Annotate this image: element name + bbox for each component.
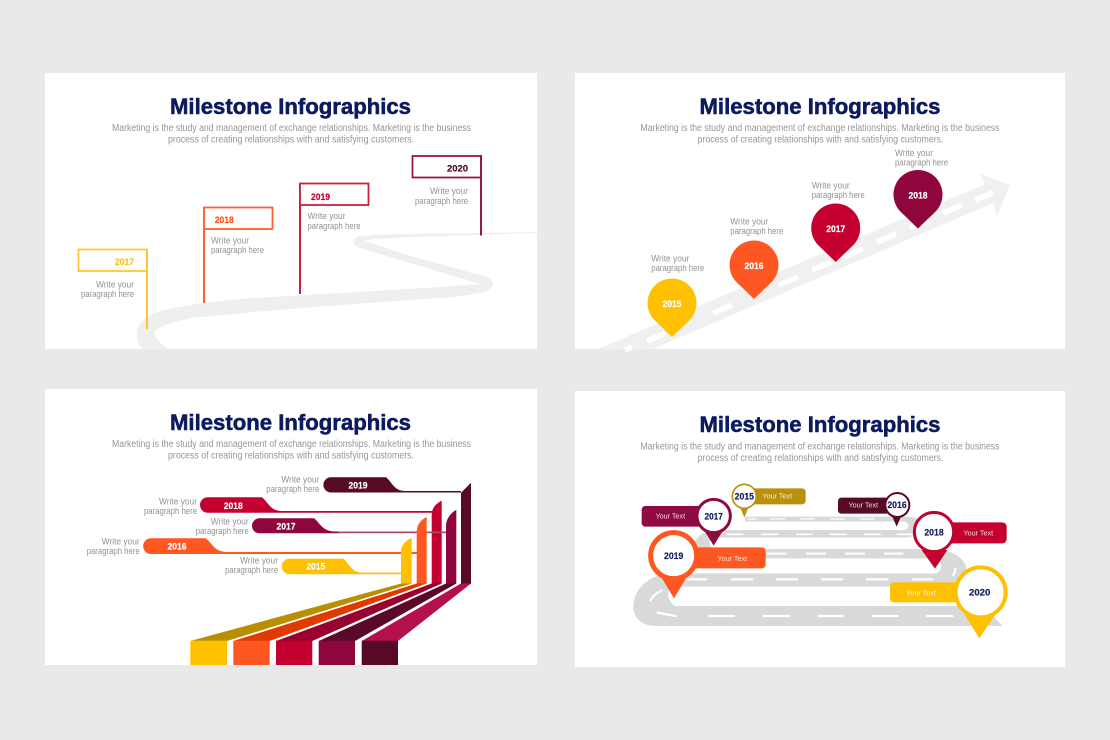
pin 2016 <box>838 493 909 527</box>
pin 2018: 2018 <box>908 190 928 201</box>
description <box>640 123 1000 146</box>
text 2016: Write your <box>730 216 768 226</box>
flag 2017 <box>78 249 147 329</box>
title: Milestone Infographics <box>700 412 940 437</box>
description: Marketing is the study and management of exchange relationships. Marketing is the business <box>112 123 471 134</box>
flag 2019: Write your <box>308 211 346 221</box>
pin 2015 <box>732 484 806 518</box>
pin 2017: 2017 <box>704 511 723 521</box>
pin 2019: 2019 <box>664 551 683 561</box>
pin 2015: Your Text <box>762 492 793 501</box>
flag 2020: Write your <box>430 186 468 196</box>
text 2015: paragraph here <box>651 263 704 273</box>
text 2015: Write your <box>651 254 689 264</box>
ribbon 2016: 2016 <box>168 542 186 552</box>
description <box>112 123 471 146</box>
pin 2019: Your Text <box>717 554 748 563</box>
text 2018: Write your <box>895 148 933 158</box>
pin 2016: 2016 <box>887 500 907 510</box>
pin 2017: Your Text <box>655 511 686 520</box>
description: Marketing is the study and management of exchange relationships. Marketing is the business <box>640 123 1000 134</box>
pin 2020 <box>890 567 1006 638</box>
description: process of creating relationships with and satisfying customers. <box>698 134 944 146</box>
flag 2018: paragraph here <box>211 245 264 255</box>
pin 2016: Your Text <box>848 501 879 510</box>
flag 2019: paragraph here <box>308 221 360 231</box>
text 2016: paragraph here <box>730 226 783 236</box>
ribbon 2018 <box>144 496 456 665</box>
pin 2018: Your Text <box>963 529 994 538</box>
title: Milestone Infographics <box>170 410 411 435</box>
ribbon 2017: paragraph here <box>196 526 249 536</box>
text 2015 <box>651 254 704 273</box>
ribbon 2019 <box>266 474 471 665</box>
pin 2017 <box>811 204 860 262</box>
ribbon 2015 <box>190 538 412 665</box>
pin 2015: 2015 <box>735 491 754 501</box>
ribbon 2016 <box>87 517 427 665</box>
description <box>112 439 471 461</box>
flag 2017: Write your <box>96 280 134 290</box>
ribbon 2015: Write your <box>240 556 278 566</box>
flag 2020: paragraph here <box>415 196 468 206</box>
pin 2017: 2017 <box>826 224 845 235</box>
panel: flags on winding road <box>45 73 537 349</box>
flag 2017: paragraph here <box>81 289 134 299</box>
panel: perspective ribbons <box>45 389 537 665</box>
pin 2018: 2018 <box>924 527 944 537</box>
ribbon 2017 <box>196 516 446 536</box>
pin 2015 <box>648 279 696 337</box>
description: process of creating relationships with and satisfying customers. <box>168 450 414 461</box>
serpentine road <box>633 517 1003 626</box>
pin 2018 <box>914 512 1007 569</box>
ribbon 2017: 2017 <box>276 522 296 532</box>
ribbon 2015: paragraph here <box>225 565 278 575</box>
ribbon 2015: 2015 <box>306 562 326 573</box>
ribbon 2016: paragraph here <box>87 546 140 556</box>
pin 2019 <box>651 533 766 598</box>
description: Marketing is the study and management of exchange relationships. Marketing is the business <box>640 442 1000 452</box>
flag 2020 <box>412 155 481 236</box>
text 2018 <box>895 148 948 168</box>
winding road <box>137 232 537 349</box>
flag 2018: 2018 <box>215 215 234 226</box>
flag 2018: Write your <box>211 236 249 246</box>
ribbon 2019: paragraph here <box>266 484 319 494</box>
ribbon 2018: Write your <box>159 496 197 506</box>
arrow road <box>598 174 1010 350</box>
flag 2019: 2019 <box>311 192 330 203</box>
text 2017 <box>812 180 865 200</box>
pin 2016 <box>730 241 778 299</box>
description <box>640 442 1000 464</box>
description: Marketing is the study and management of exchange relationships. Marketing is the business <box>112 439 471 450</box>
flag 2017: 2017 <box>115 257 134 268</box>
ribbon 2019: Write your <box>281 474 319 484</box>
title: Milestone Infographics <box>700 94 940 119</box>
text 2017: Write your <box>812 180 850 190</box>
description: process of creating relationships with and satisfying customers. <box>168 134 414 146</box>
title: Milestone Infographics <box>170 94 411 119</box>
ribbon 2017: Write your <box>211 516 249 526</box>
description: process of creating relationships with and satisfying customers. <box>698 453 944 464</box>
panel: location pins on arrow road <box>575 73 1065 350</box>
text 2017: paragraph here <box>812 190 865 200</box>
text 2018: paragraph here <box>895 158 948 168</box>
ribbon 2016: Write your <box>102 536 140 546</box>
flag 2019 <box>300 183 368 294</box>
pin 2017 <box>642 499 730 546</box>
pin 2020: 2020 <box>969 588 990 598</box>
ribbon 2019: 2019 <box>348 480 368 492</box>
road scene <box>633 484 1007 638</box>
panel: serpentine road with pins <box>575 391 1065 667</box>
flag 2018 <box>204 207 272 303</box>
ribbon 2018: 2018 <box>224 501 243 512</box>
text 2016 <box>730 216 783 236</box>
flag 2020: 2020 <box>447 164 468 174</box>
pin 2016: 2016 <box>744 261 764 272</box>
ribbon 2018: paragraph here <box>144 506 197 516</box>
pin 2020: Your Text <box>906 589 937 598</box>
pin 2015: 2015 <box>662 299 682 310</box>
pin 2018 <box>894 170 942 228</box>
